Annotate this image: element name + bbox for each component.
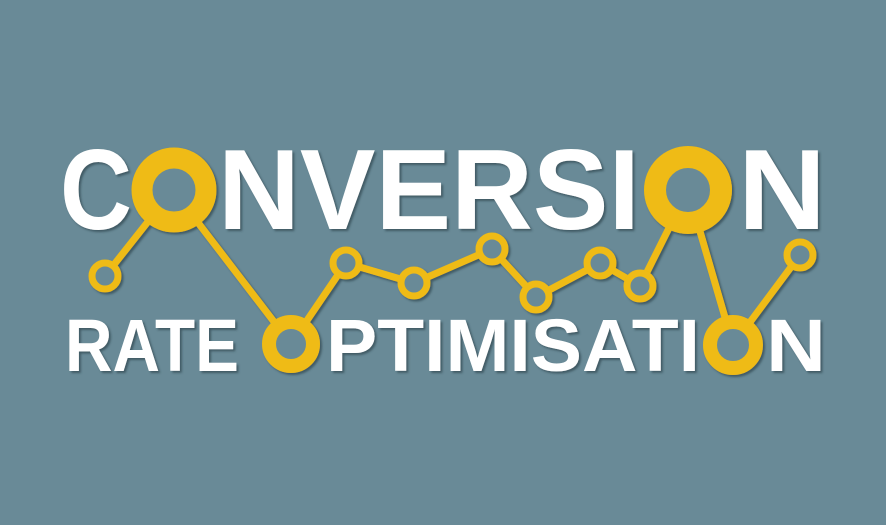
title line: CONVERSION: C [60, 127, 132, 254]
subtitle line: RATE OPTIMISATION: RATE [65, 304, 239, 387]
subtitle line: RATE OPTIMISATION: PTIMISATI [326, 304, 700, 387]
O: optimisation last [710, 322, 756, 368]
big O: conversion first O [142, 158, 206, 222]
O: optimisation [269, 322, 313, 366]
subtitle line: RATE OPTIMISATION [65, 304, 826, 387]
data points [92, 236, 813, 310]
title line: CONVERSION [60, 127, 826, 254]
big O: conversion second O [655, 157, 721, 223]
line chart [92, 157, 813, 368]
title line: CONVERSION: NVERSI [218, 127, 640, 254]
title line: CONVERSION: N [738, 127, 826, 254]
subtitle line: RATE OPTIMISATION: N [766, 304, 826, 387]
